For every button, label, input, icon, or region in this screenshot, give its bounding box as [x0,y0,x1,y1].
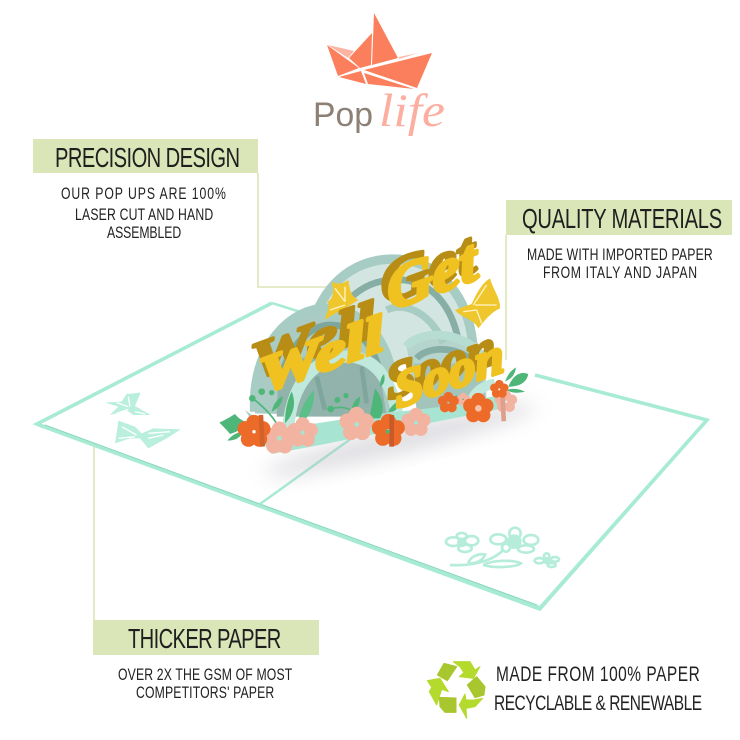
gold lettering: Well [255,304,387,405]
shadow lettering: Well [247,290,379,391]
body text: MADE WITH IMPORTED PAPER [527,246,713,265]
pop-up sculpture [219,217,528,454]
body text [61,185,226,243]
recycling text [494,661,702,715]
icon: recycling symbol [427,662,485,718]
heading: THICKER PAPER [128,624,281,655]
body text: ASSEMBLED [107,224,181,243]
gold lettering [255,224,507,419]
body text: OVER 2X THE GSM OF MOST [118,666,292,685]
heading band [93,620,319,655]
gold lettering: Get [383,224,483,324]
open card [37,303,707,610]
pink flower cut details [277,389,506,441]
recycling text: RECYCLABLE & RENEWABLE [494,690,702,715]
back arcs [255,259,495,427]
heading band [506,200,732,235]
leaves [219,367,528,441]
card outline [37,303,707,608]
heading band [33,139,258,173]
wordmark: life [379,85,445,137]
flower stems and centres [259,405,482,447]
panel: precision design [33,139,258,243]
fold line [260,438,352,504]
butterfly left [325,280,358,320]
pink flowers [263,390,517,453]
heading: QUALITY MATERIALS [522,204,722,235]
wordmark: Pop [313,96,373,134]
body text [527,246,713,283]
body text: COMPETITORS' PAPER [136,684,274,703]
body text: FROM ITALY AND JAPAN [543,264,697,283]
icon: flowers on card [446,528,559,567]
butterfly right [455,278,500,328]
heading: PRECISION DESIGN [55,143,240,174]
lettering: Get Well Soon [247,217,507,419]
logo: Poplife [313,13,445,137]
front arcs [255,308,393,412]
dome fills [310,259,473,363]
panel: quality materials [506,200,732,283]
gold lettering: Soon [391,326,507,419]
wordmark [313,85,445,137]
shadow lettering [247,217,498,411]
shadow lettering: Soon [383,317,498,411]
body text: OUR POP UPS ARE 100% [61,185,226,204]
base strip [263,393,508,454]
body text: LASER CUT AND HAND [75,206,213,225]
body text [118,666,292,703]
shadow lettering: Get [376,217,481,318]
recycling text: MADE FROM 100% PAPER [496,661,700,686]
icon: butterflies on card [105,393,181,448]
orange flowers [237,380,509,447]
shadow under pop-up [261,394,539,486]
panel: thicker paper [93,620,319,703]
icon: paper boat [327,13,432,89]
callout connector lines [94,173,506,620]
